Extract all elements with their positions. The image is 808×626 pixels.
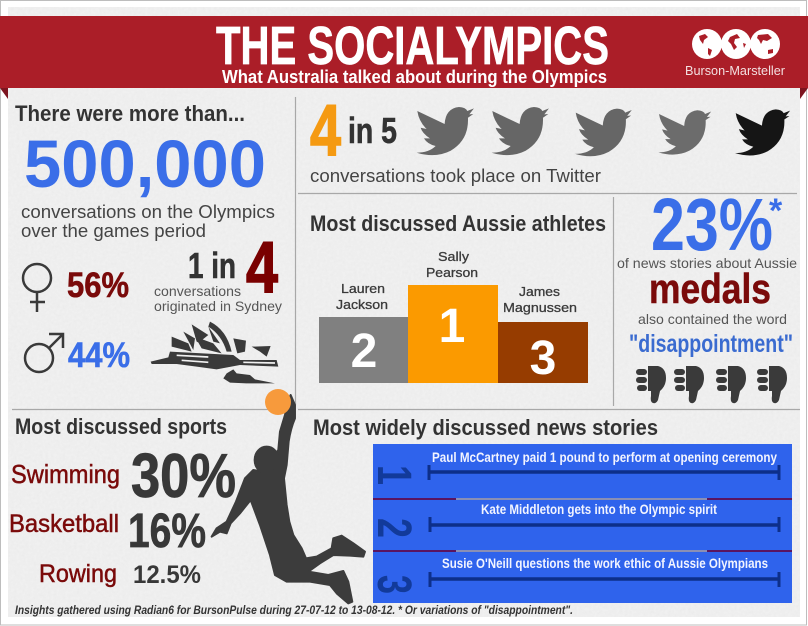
icon: bird row (417, 107, 790, 156)
podium chart: James (519, 284, 561, 299)
icon: female symbol (23, 264, 51, 312)
label: Basketball: Basketball (9, 510, 119, 538)
panel: disappointment (617, 183, 797, 403)
illustration: basketball player (212, 389, 365, 603)
icon: thumbs down row (636, 366, 787, 403)
podium chart: Lauren (341, 281, 385, 296)
footnote: Insights gathered using Radian6 for BursonPulse during 27-07-12 to 13-08-12. * Or variations of "disappointment". (15, 603, 573, 617)
panel: conversations (15, 101, 282, 383)
swimming pool (367, 444, 792, 603)
heading: athletes: Most discussed Aussie athletes (310, 211, 606, 236)
rank 1: 1 (367, 465, 420, 485)
stat: 12.5%: 12.5% (133, 561, 201, 589)
heading: more than: There were more than... (15, 101, 245, 126)
text: took place on Twitter: conversations took place on Twitter (310, 166, 601, 186)
footnote asterisk: * (769, 192, 783, 230)
title: THE SOCIALYMPICS (216, 16, 609, 76)
rank 2: 2 (367, 518, 420, 538)
text: also contained: also contained the word (638, 311, 787, 327)
podium chart: 2 (351, 325, 377, 378)
stat: 1 in: 1 in (188, 245, 236, 286)
stat: in 5: in 5 (348, 110, 397, 151)
podium chart: Pearson (426, 265, 478, 280)
heading: sports: Most discussed sports (15, 414, 227, 439)
rank 3: 3 (367, 575, 420, 594)
label: Rowing: Rowing (39, 560, 117, 588)
subtitle: What Australia talked about during the Olympics (222, 67, 607, 87)
stat: 4: 4 (310, 91, 341, 171)
podium chart: 3 (530, 332, 556, 385)
big number: 500,000: 500,000 (24, 127, 266, 202)
text: originated in Sydney: originated in Sydney (154, 298, 282, 314)
word: medals: medals (649, 265, 771, 312)
stat: 30%: 30% (131, 442, 236, 511)
podium chart: Jackson (336, 297, 388, 312)
panel: athletes (310, 211, 606, 385)
story 2: Kate Middleton gets into the Olympic spirit (481, 501, 717, 517)
icon: male symbol (25, 334, 63, 372)
banner (0, 16, 808, 99)
stat: 56%: 56% (67, 266, 129, 305)
text: news stories: of news stories about Aussie (617, 255, 797, 271)
panel: news stories (313, 415, 792, 603)
logo: Burson-Marsteller (685, 29, 786, 78)
panel dividers (12, 97, 800, 410)
podium chart: Magnussen (503, 300, 577, 315)
panel: Twitter (310, 91, 790, 186)
heading: news stories: Most widely discussed news stories (313, 415, 658, 440)
podium chart: Sally (438, 249, 470, 264)
panel: sports (9, 414, 236, 589)
stat: 4: 4 (246, 228, 278, 308)
text: conversations on the Olympics: conversations on the Olympics (21, 202, 275, 222)
label: Swimming: Swimming (11, 459, 120, 489)
podium chart: 1 (439, 300, 465, 353)
icon: Sydney Opera House (151, 322, 278, 383)
stat: 16%: 16% (128, 505, 206, 558)
stat: 44%: 44% (68, 336, 130, 375)
logo: Burson-Marsteller: Burson-Marsteller (685, 63, 786, 78)
text: conversations: conversations (154, 283, 241, 299)
podium chart (319, 249, 588, 385)
stat: 23%: 23% (651, 183, 773, 266)
text: games period: over the games period (21, 221, 206, 241)
